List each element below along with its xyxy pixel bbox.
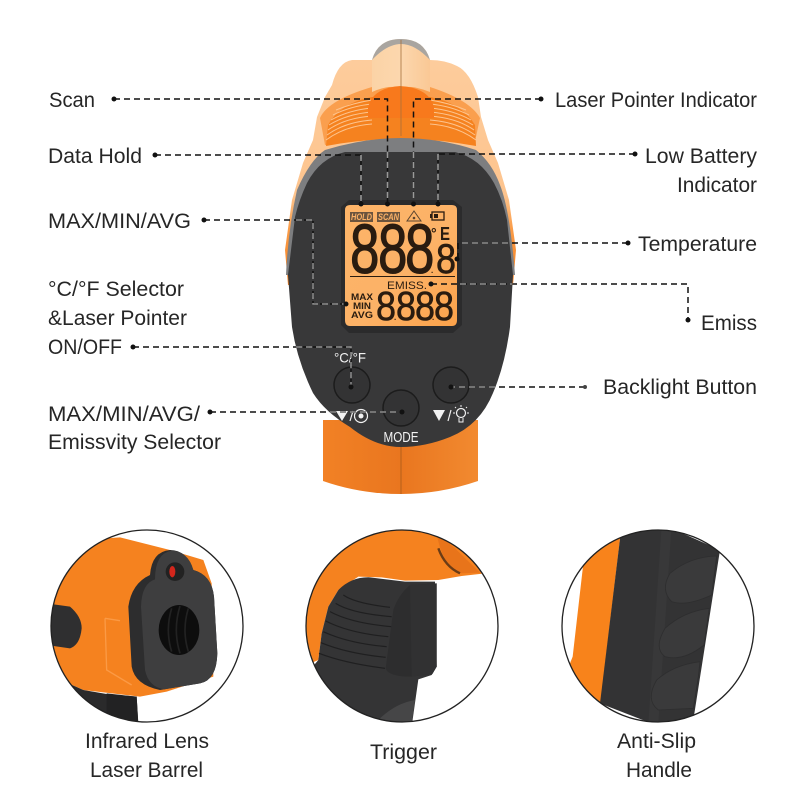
label: unit selector and laser: &Laser Pointer (48, 307, 187, 330)
panel: trigger detail (305, 529, 499, 723)
icon: down and laser (336, 410, 368, 422)
mode labels: AVG (351, 310, 373, 321)
mode button label: MODE (384, 429, 418, 446)
caption: trigger: Trigger (370, 741, 437, 764)
laser aperture (166, 562, 184, 581)
black control face (288, 152, 513, 447)
secondary reading: 8 (396, 284, 416, 330)
orange stripe (570, 538, 620, 702)
mode labels (351, 292, 374, 321)
label: unit selector and laser (48, 278, 187, 359)
mode labels: MAX (351, 292, 374, 303)
label: mode selector (48, 403, 221, 454)
caption: lens barrel (85, 730, 209, 782)
thermometer front view (285, 39, 516, 494)
label: mode selector: MAX/MIN/AVG/ (48, 403, 200, 426)
mode labels: MIN (353, 301, 371, 312)
main reading: 8 (350, 211, 379, 289)
leader lines (112, 96, 690, 414)
icon: down and bulb (433, 405, 469, 422)
button: unit selector (334, 367, 370, 403)
secondary reading: 8 (376, 284, 396, 330)
secondary reading: . (432, 313, 434, 322)
label: low battery indicator: Indicator (677, 174, 757, 197)
orange barrel (40, 537, 213, 697)
threaded hole (159, 605, 199, 655)
label: scan: Scan (49, 89, 95, 112)
main reading: 8 (378, 211, 407, 289)
HOLD tag: HOLD (351, 212, 372, 222)
trigger side plate (391, 583, 437, 674)
caption: handle: Handle (626, 759, 692, 782)
caption: handle (617, 730, 696, 782)
secondary reading: . (394, 313, 396, 322)
button: mode (383, 390, 419, 426)
grip bumps (651, 577, 668, 710)
unit letter: E (440, 224, 450, 244)
black grip (600, 523, 720, 727)
label: max min avg: MAX/MIN/AVG (48, 210, 191, 233)
black grip (314, 577, 437, 721)
secondary reading (376, 284, 454, 330)
front plate (141, 551, 217, 689)
SCAN tag: SCAN (378, 212, 399, 222)
panel: handle detail (562, 523, 754, 727)
cooling fins (320, 87, 480, 146)
label: unit selector and laser: ON/OFF (48, 336, 122, 359)
label: temperature: Temperature (638, 233, 757, 256)
black side band (52, 604, 82, 648)
degree symbol: ° (431, 225, 437, 241)
main reading: 8 (436, 236, 456, 283)
unit button label: °C/°F (334, 350, 366, 366)
label: backlight button: Backlight Button (603, 376, 757, 399)
lower black grip (72, 684, 138, 721)
secondary reading: 8 (434, 284, 454, 330)
label: mode selector: Emissvity Selector (48, 431, 221, 454)
side plate (128, 550, 217, 690)
LCD bezel (341, 200, 462, 333)
label: low battery indicator (645, 145, 758, 197)
EMISS label: EMISS. (387, 280, 427, 292)
body shell (285, 60, 516, 285)
icon: laser warning (407, 211, 421, 221)
main reading: . (431, 266, 433, 275)
grey bezel (286, 138, 515, 275)
handle (323, 420, 478, 494)
trigger ridges (319, 595, 392, 668)
label: laser pointer indicator: Laser Pointer Indicator (555, 89, 757, 112)
lens barrel (372, 39, 430, 92)
secondary reading: 8 (415, 284, 435, 330)
LCD screen (345, 205, 457, 330)
label: unit selector and laser: °C/°F Selector (48, 278, 184, 301)
label: low battery indicator: Low Battery (645, 145, 758, 168)
label: data hold: Data Hold (48, 145, 142, 168)
orange collar (368, 86, 434, 118)
caption: handle: Anti-Slip (617, 730, 696, 753)
main reading (350, 211, 456, 289)
caption: lens barrel: Laser Barrel (90, 759, 203, 782)
icon: battery (430, 212, 444, 220)
button: backlight (433, 367, 469, 403)
orange housing (306, 530, 482, 662)
label: emiss: Emiss (701, 312, 757, 335)
caption: lens barrel: Infrared Lens (85, 730, 209, 753)
panel: lens detail (40, 530, 243, 725)
main reading: 8 (405, 211, 434, 289)
